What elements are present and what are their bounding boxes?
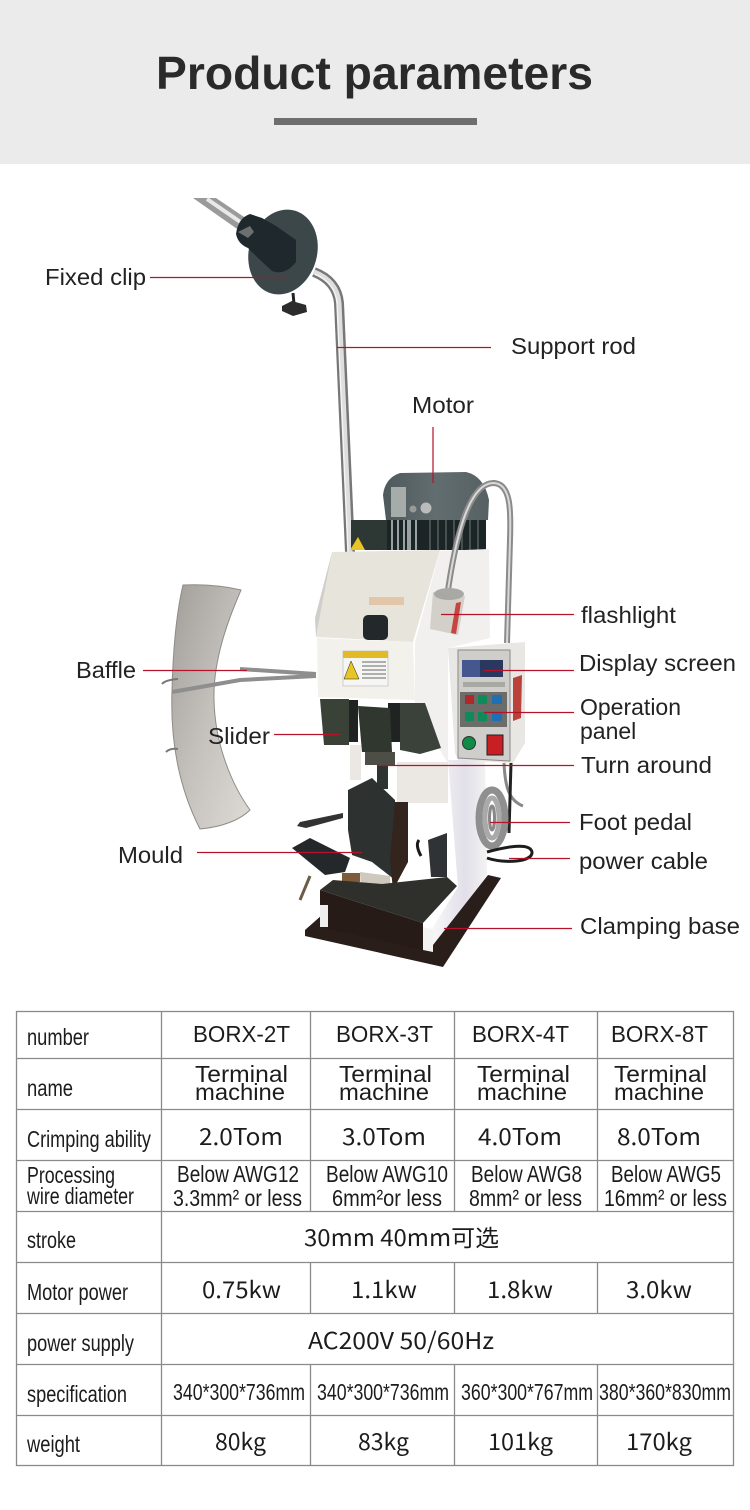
callout: Slider: [208, 723, 340, 749]
row: number: BORX-3T: [336, 1021, 433, 1047]
row: specification: 340*300*736mm: [317, 1379, 449, 1405]
row: name: Terminal: [614, 1061, 707, 1087]
motor: [350, 472, 489, 550]
row labels: stroke: [27, 1227, 76, 1253]
callout: Motor: Motor: [412, 392, 474, 418]
body housing: [315, 549, 490, 763]
row: crimping ability: 3.0Tom: [342, 1118, 426, 1152]
callout: Operation panel: [484, 694, 681, 744]
title underline bar: [274, 118, 477, 125]
row: number: BORX-2T: [193, 1021, 290, 1047]
callout: flashlight: flashlight: [581, 602, 677, 628]
back wall: [350, 745, 448, 803]
operation panel buttons: [460, 692, 507, 727]
row: wire diameter: Below AWG10: [326, 1161, 448, 1187]
row: name: Terminal: [195, 1061, 288, 1087]
row: motor power: 0.75kw: [202, 1271, 281, 1305]
callout: Fixed clip: Fixed clip: [45, 264, 146, 290]
row: motor power: 3.0kw: [626, 1271, 692, 1305]
row: crimping ability: 2.0Tom: [199, 1118, 283, 1152]
row: motor power: [202, 1271, 692, 1305]
row: weight: 80kg: [215, 1423, 266, 1457]
baffle: [162, 585, 316, 829]
row: weight: 83kg: [358, 1423, 409, 1457]
row: wire diameter: 8mm² or less: [469, 1185, 582, 1211]
control box: [448, 642, 525, 763]
callout: Baffle: Baffle: [76, 657, 136, 683]
callout: Clamping base: Clamping base: [580, 913, 740, 939]
callout: Motor: [412, 392, 474, 483]
start button and red switch: [462, 735, 503, 755]
row: specification: [173, 1379, 731, 1405]
row: crimping ability: [199, 1118, 701, 1152]
row: wire diameter: 6mm²or less: [332, 1185, 442, 1211]
row: name: Terminal: [477, 1061, 570, 1087]
row labels: name: [27, 1075, 73, 1101]
callout: Display screen: Display screen: [579, 650, 736, 676]
machine illustration: [162, 198, 532, 967]
lower column: [433, 760, 487, 952]
row: name: Terminal: [339, 1061, 432, 1087]
row labels: [26, 1024, 151, 1457]
row labels: number: [27, 1024, 89, 1050]
row labels: Motor power: [27, 1279, 128, 1305]
caution label: [343, 651, 388, 686]
row: number: BORX-8T: [611, 1021, 708, 1047]
row: stroke: 30mm 40mm可选: [304, 1219, 499, 1253]
row: wire diameter: [173, 1161, 727, 1211]
clamping base: [305, 875, 501, 967]
row: motor power: 1.8kw: [487, 1271, 553, 1305]
row labels: wire diameter: [26, 1183, 134, 1209]
callout: Operation panel: panel: [580, 718, 636, 744]
row: weight: [215, 1423, 692, 1457]
row labels: specification: [27, 1381, 127, 1407]
row labels: power supply: [27, 1330, 134, 1356]
power cable: [487, 846, 532, 861]
callout: Slider: Slider: [208, 723, 270, 749]
spec table: [16, 1012, 734, 1466]
callout: Foot pedal: Foot pedal: [579, 809, 692, 835]
row: weight: 170kg: [626, 1423, 692, 1457]
table grid: [16, 1012, 734, 1466]
row: name: [195, 1061, 707, 1105]
row: name: machine: [195, 1079, 285, 1105]
row: name: machine: [477, 1079, 567, 1105]
flashlight gooseneck: [430, 483, 510, 643]
fixed clip disc: [236, 201, 328, 316]
row: wire diameter: 16mm² or less: [604, 1185, 727, 1211]
row: number: [193, 1021, 708, 1047]
row: specification: 360*300*767mm: [461, 1379, 593, 1405]
row: name: machine: [339, 1079, 429, 1105]
row: name: machine: [614, 1079, 704, 1105]
row: number: BORX-4T: [472, 1021, 569, 1047]
callout: Mould: Mould: [118, 842, 183, 868]
row: motor power: 1.1kw: [351, 1271, 417, 1305]
row: wire diameter: Below AWG12: [177, 1161, 299, 1187]
foot pedal: [417, 833, 447, 877]
row: specification: 340*300*736mm: [173, 1379, 305, 1405]
callout: Operation panel: Operation: [580, 694, 681, 720]
row labels: Crimping ability: [27, 1126, 151, 1152]
row: wire diameter: 3.3mm² or less: [173, 1185, 302, 1211]
callout: Support rod: Support rod: [511, 333, 636, 359]
row labels: weight: [26, 1431, 80, 1457]
support rod: [193, 198, 350, 552]
slider and ram: [320, 699, 441, 789]
row: wire diameter: Below AWG8: [471, 1161, 582, 1187]
row: wire diameter: Below AWG5: [611, 1161, 721, 1187]
mould: [292, 778, 408, 900]
callout: power cable: power cable: [579, 848, 708, 874]
row: crimping ability: 8.0Tom: [617, 1118, 701, 1152]
header band: [0, 0, 750, 164]
row: weight: 101kg: [488, 1423, 553, 1457]
row: power supply: AC200V 50/60Hz: [308, 1322, 494, 1356]
title: Product parameters: [156, 47, 593, 99]
row labels: Processing: [27, 1162, 115, 1188]
callout: Turn around: Turn around: [581, 752, 712, 778]
display screen: [462, 660, 503, 677]
cable coil: [479, 763, 523, 846]
row: crimping ability: 4.0Tom: [478, 1118, 562, 1152]
